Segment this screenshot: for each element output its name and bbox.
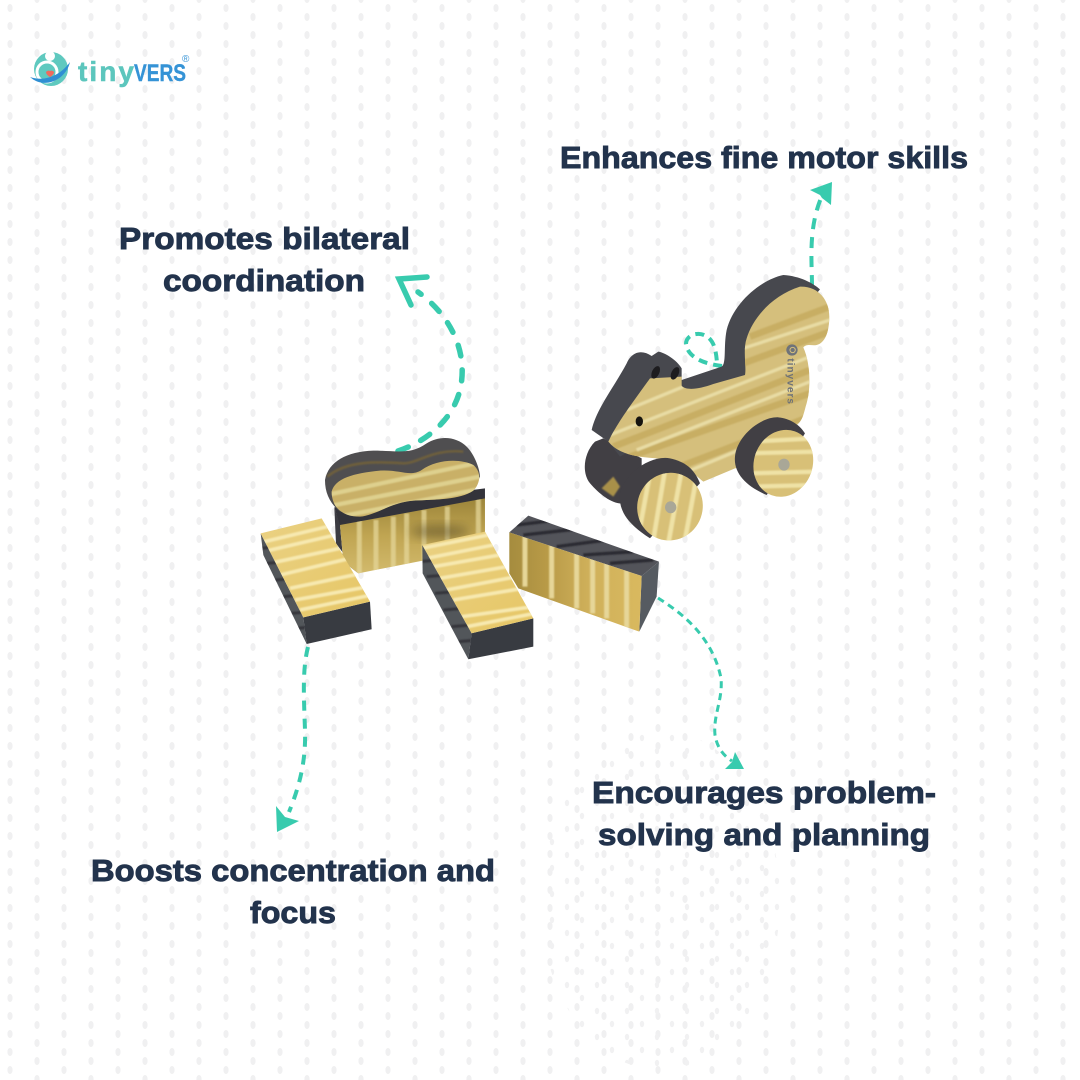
heading: encourages problem-solving and planning: solving and planning [598, 817, 930, 852]
block: left flat block [260, 518, 372, 644]
heading: promotes bilateral coordination [119, 221, 410, 298]
heading: encourages problem-solving and planning: Encourages problem- [592, 775, 936, 810]
arrow: squirrel to fine motor skills [686, 182, 832, 366]
squirrel wood face [608, 287, 829, 482]
arrow: flat block to concentration [276, 647, 308, 832]
logo: tinyvers [30, 51, 190, 87]
arrow: peanut block to bilateral coordination [398, 277, 462, 451]
squirrel back wheel and nose block [585, 438, 642, 503]
logo wordmark: tiny [78, 56, 134, 87]
logo wordmark: VERS [134, 60, 186, 87]
block: peanut shape [325, 438, 483, 517]
registered mark: ® [182, 54, 190, 65]
squirrel eye [636, 416, 643, 426]
heading: boosts concentration and focus: Boosts concentration and [91, 853, 495, 888]
heading: promotes bilateral coordination: Promotes bilateral [119, 221, 410, 256]
heading: boosts concentration and focus: focus [250, 895, 336, 930]
block: stacked base block [334, 488, 485, 577]
toy: wooden squirrel [585, 275, 830, 550]
heading: boosts concentration and focus [91, 853, 495, 930]
logo wordmark [78, 56, 186, 87]
ear holes [650, 365, 681, 381]
front wheel [620, 458, 703, 540]
tinyvers branding on toy [785, 344, 798, 404]
block: middle flat block [420, 532, 535, 659]
heading: enhances fine motor skills: Enhances fine motor skills [560, 140, 968, 175]
squirrel dark rim [592, 275, 820, 457]
tinyvers branding on toy: tinyvers [785, 358, 796, 404]
block: long side block [509, 516, 659, 632]
rear wheel [734, 417, 814, 497]
toy: wooden blocks [260, 438, 659, 659]
heading: encourages problem-solving and planning [592, 775, 936, 852]
heading: promotes bilateral coordination: coordination [163, 263, 365, 298]
arrow: long block to problem solving [658, 598, 744, 769]
icon: logo globe [30, 51, 70, 86]
